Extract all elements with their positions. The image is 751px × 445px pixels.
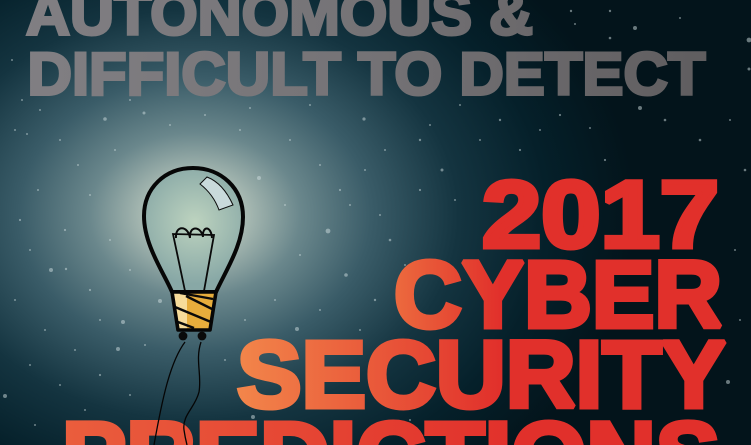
title line: Security: SECURITY [237,322,726,428]
filament [173,228,214,291]
contacts [179,332,187,340]
title: 2017 cyber security predictions [62,162,726,445]
icon: light bulb [144,168,243,445]
bulb highlight [200,177,233,210]
screw base [172,292,216,330]
heading line: Difficult to detect: DIFFICULT TO DETECT [28,40,706,108]
title line: 2017: 2017 [482,162,719,268]
heading: gray faded text [26,0,706,108]
wires [154,342,201,445]
title line: Cyber: CYBER [394,242,722,348]
bulb glass [144,168,243,292]
